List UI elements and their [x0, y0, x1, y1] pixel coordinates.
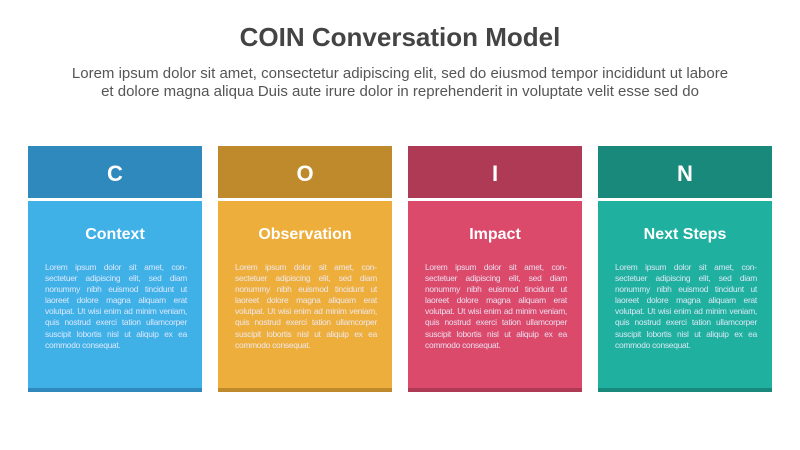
body impact [408, 201, 582, 392]
body context: Context [85, 226, 145, 243]
body context [28, 201, 202, 392]
body observation: Lorem ipsum dolor sit amet, con­sectetuer adipiscing elit, sed diam nonummy nibh euismod tincidunt ut laoreet dolore magna aliquam erat volutpat. Ut wisi enim ad minim veniam, quis nostrud exerci tation ullamcorper suscipit lobortis nisl ut aliquip ex ea commodo consequat. [235, 262, 377, 350]
header I [408, 146, 582, 198]
body next steps: Next Steps [644, 226, 726, 243]
body impact: Impact [469, 226, 521, 243]
subtitle: Lorem ipsum dolor sit amet, consectetur adipiscing elit, sed do eiusmod tempor incididunt ut labore [72, 65, 728, 82]
header N [598, 146, 772, 198]
header O [218, 146, 392, 198]
body next steps: Lorem ipsum dolor sit amet, con­sectetuer adipiscing elit, sed diam nonummy nibh euismod tincidunt ut laoreet dolore magna aliquam erat volutpat. Ut wisi enim ad minim veniam, quis nostrud exerci tation ullamcorper suscipit lobortis nisl ut aliquip ex ea commodo consequat. [615, 262, 757, 350]
header C [28, 146, 202, 198]
body observation: Observation [258, 226, 352, 243]
header N: N [677, 161, 693, 186]
panel: N next steps [598, 146, 772, 392]
body context: Lorem ipsum dolor sit amet, con­sectetuer adipiscing elit, sed diam nonummy nibh euismod tincidunt ut laoreet dolore magna aliquam erat volutpat. Ut wisi enim ad minim veniam, quis nostrud exerci tation ullamcorper suscipit lobortis nisl ut aliquip ex ea commodo consequat. [45, 262, 187, 350]
header C: C [107, 161, 123, 186]
header O: O [296, 161, 314, 186]
panel: I impact [408, 146, 582, 392]
subtitle: et dolore magna aliqua Duis aute irure dolor in reprehenderit in voluptate velit esse sed do [101, 83, 699, 100]
subtitle [72, 65, 728, 100]
panel: O observation [218, 146, 392, 392]
panel: C context [28, 146, 202, 392]
header I: I [492, 161, 498, 186]
body observation [218, 201, 392, 392]
body next steps [598, 201, 772, 392]
body impact: Lorem ipsum dolor sit amet, con­sectetuer adipiscing elit, sed diam nonummy nibh euismod tincidunt ut laoreet dolore magna aliquam erat volutpat. Ut wisi enim ad minim veniam, quis nostrud exerci tation ullamcorper suscipit lobortis nisl ut aliquip ex ea commodo consequat. [425, 262, 567, 350]
title: COIN Conversation Model [240, 22, 560, 52]
